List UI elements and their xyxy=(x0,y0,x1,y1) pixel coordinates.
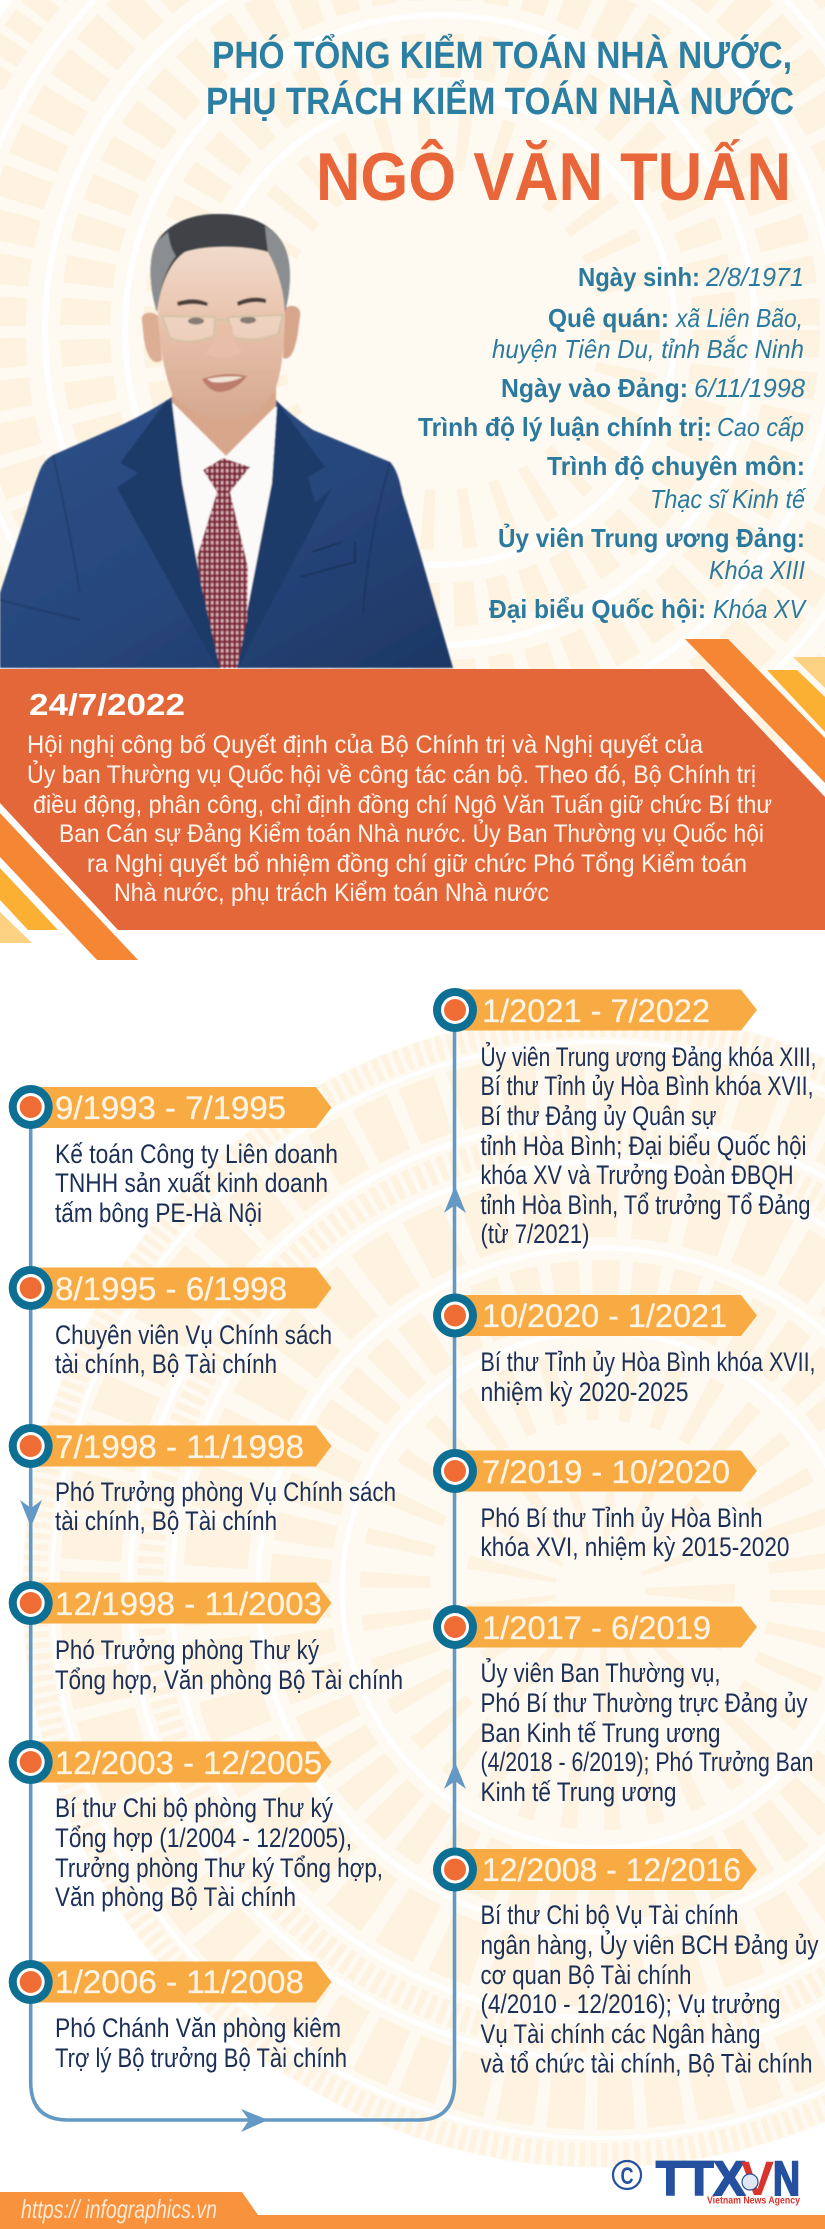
arrow: up upper xyxy=(444,1186,466,1213)
timeline item: 12/2008 - 12/2016 xyxy=(433,1848,819,2078)
timeline item: 12/2008 - 12/2016: Vụ Tài chính các Ngân hàng xyxy=(480,2019,760,2049)
banner text: Hội nghị công bố Quyết định của Bộ Chính trị và Nghị quyết của xyxy=(27,731,703,759)
banner text: điều động, phân công, chỉ định đồng chí Ngô Văn Tuấn giữ chức Bí thư xyxy=(33,791,772,819)
arrow: right xyxy=(241,2109,268,2132)
timeline item: 1/2006 - 11/2008 xyxy=(9,1960,347,2073)
timeline item: 12/1998 - 11/2003: 12/1998 - 11/2003 xyxy=(55,1586,322,1622)
logo: TTXVN Vietnam News Agency xyxy=(613,2153,800,2206)
timeline item: 7/2019 - 10/2020: Phó Bí thư Tỉnh ủy Hòa Bình xyxy=(480,1503,762,1533)
banner text: ra Nghị quyết bổ nhiệm đồng chí giữ chức Phó Tổng Kiểm toán xyxy=(87,850,747,878)
timeline item: 12/2003 - 12/2005 xyxy=(9,1740,383,1912)
personal information list: Cao cấp xyxy=(717,412,804,442)
timeline item: 9/1993 - 7/1995: 9/1993 - 7/1995 xyxy=(55,1090,286,1126)
personal information list: Trình độ lý luận chính trị: xyxy=(418,412,712,442)
personal information list: Thạc sĩ Kinh tế xyxy=(650,484,806,514)
timeline item: 1/2017 - 6/2019: 1/2017 - 6/2019 xyxy=(482,1610,711,1646)
banner text xyxy=(27,731,772,907)
background: lower bronze drum pattern xyxy=(22,1012,825,2168)
personal information list: Ngày vào Đảng: xyxy=(501,373,688,403)
timeline item: 8/1995 - 6/1998 xyxy=(9,1266,332,1379)
logo: TTXVN Vietnam News Agency: TTX xyxy=(656,2153,745,2206)
timeline item: 12/2003 - 12/2005: Trưởng phòng Thư ký Tổng hợp, xyxy=(55,1853,383,1883)
timeline item: 8/1995 - 6/1998: 8/1995 - 6/1998 xyxy=(55,1271,287,1307)
personal information list: xã Liên Bão, xyxy=(674,303,803,333)
timeline item: 12/1998 - 11/2003: Phó Trưởng phòng Thư ký xyxy=(55,1635,320,1665)
timeline item: 1/2017 - 6/2019: Ủy viên Ban Thường vụ, xyxy=(480,1658,720,1688)
timeline item: 1/2017 - 6/2019: Kinh tế Trung ương xyxy=(480,1777,676,1807)
logo: TTXVN Vietnam News Agency: Vietnam News Agency xyxy=(707,2194,800,2206)
personal information list xyxy=(418,262,807,624)
banner date: 24/7/2022 xyxy=(29,687,185,722)
footer bar xyxy=(0,2192,825,2229)
personal information list: 6/11/1998 xyxy=(694,373,806,403)
timeline item: 12/2003 - 12/2005: Bí thư Chi bộ phòng Thư ký xyxy=(55,1793,334,1823)
timeline item: 1/2021 - 7/2022: (từ 7/2021) xyxy=(480,1219,590,1249)
timeline item: 12/1998 - 11/2003 xyxy=(9,1581,403,1695)
timeline item: 12/2003 - 12/2005: 12/2003 - 12/2005 xyxy=(55,1745,322,1781)
timeline item: 10/2020 - 1/2021: nhiệm kỳ 2020-2025 xyxy=(480,1377,688,1407)
timeline item: 12/2008 - 12/2016: (4/2010 - 12/2016); Vụ trưởng xyxy=(480,1989,780,2019)
timeline item: 1/2017 - 6/2019: Ban Kinh tế Trung ương xyxy=(480,1718,720,1748)
timeline item: 8/1995 - 6/1998: tài chính, Bộ Tài chính xyxy=(55,1349,277,1379)
timeline item: 12/2003 - 12/2005: Tổng hợp (1/2004 - 12/2005), xyxy=(55,1823,352,1853)
timeline item: 10/2020 - 1/2021 xyxy=(433,1294,816,1407)
timeline connector line xyxy=(31,1010,454,2120)
banner text: Nhà nước, phụ trách Kiểm toán Nhà nước xyxy=(114,879,549,907)
timeline item: 7/1998 - 11/1998: tài chính, Bộ Tài chính xyxy=(55,1506,277,1536)
timeline item: 9/1993 - 7/1995: tấm bông PE-Hà Nội xyxy=(55,1198,262,1228)
logo: TTXVN Vietnam News Agency: V xyxy=(741,2153,774,2206)
timeline item: 9/1993 - 7/1995: TNHH sản xuất kinh doanh xyxy=(55,1168,328,1198)
timeline item: 1/2017 - 6/2019 xyxy=(433,1605,814,1807)
timeline item: 12/2008 - 12/2016: Bí thư Chi bộ Vụ Tài chính xyxy=(480,1900,738,1930)
personal information list: Khóa XIII xyxy=(709,555,805,585)
timeline item: 12/2008 - 12/2016: cơ quan Bộ Tài chính xyxy=(480,1960,692,1990)
timeline item: 12/1998 - 11/2003: Tổng hợp, Văn phòng Bộ Tài chính xyxy=(55,1665,403,1695)
decorative stripes: top right of banner xyxy=(685,639,825,783)
title xyxy=(206,32,794,123)
banner: 24/7/2022 event xyxy=(0,669,825,930)
timeline item: 12/2003 - 12/2005: Văn phòng Bộ Tài chính xyxy=(55,1882,296,1912)
personal information list: huyện Tiên Du, tỉnh Bắc Ninh xyxy=(492,334,804,364)
personal information list: Đại biểu Quốc hội: xyxy=(489,594,706,624)
timeline item: 8/1995 - 6/1998: Chuyên viên Vụ Chính sách xyxy=(55,1320,332,1350)
personal information list: 2/8/1971 xyxy=(705,262,804,292)
personal information list: Khóa XV xyxy=(713,594,807,624)
timeline item: 1/2021 - 7/2022: Bí thư Đảng ủy Quân sự xyxy=(480,1101,716,1131)
banner text: Ủy ban Thường vụ Quốc hội về công tác cán bộ. Theo đó, Bộ Chính trị xyxy=(27,759,756,789)
logo: TTXVN Vietnam News Agency: N xyxy=(773,2153,800,2206)
personal information list: Quê quán: xyxy=(548,303,669,333)
personal information list: Ngày sinh: xyxy=(578,262,700,292)
timeline item: 7/2019 - 10/2020 xyxy=(433,1449,790,1562)
timeline item: 9/1993 - 7/1995 xyxy=(9,1085,338,1228)
banner text: Ban Cán sự Đảng Kiểm toán Nhà nước. Ủy Ban Thường vụ Quốc hội xyxy=(59,818,764,848)
timeline item: 1/2006 - 11/2008: 1/2006 - 11/2008 xyxy=(55,1964,304,2000)
timeline item: 9/1993 - 7/1995: Kế toán Công ty Liên doanh xyxy=(55,1139,338,1169)
decorative stripes: bottom left of banner xyxy=(0,813,138,960)
timeline item: 7/1998 - 11/1998: Phó Trưởng phòng Vụ Chính sách xyxy=(55,1477,396,1507)
timeline item: 10/2020 - 1/2021: 10/2020 - 1/2021 xyxy=(482,1298,727,1334)
timeline item: 7/2019 - 10/2020: 7/2019 - 10/2020 xyxy=(482,1454,730,1490)
arrow: down xyxy=(20,1500,42,1527)
timeline item: 7/1998 - 11/1998 xyxy=(9,1424,396,1536)
timeline item: 12/2008 - 12/2016: 12/2008 - 12/2016 xyxy=(482,1852,741,1888)
footer url: https:// infographics.vn xyxy=(21,2194,217,2224)
background: upper bronze drum pattern xyxy=(0,0,825,870)
timeline item: 7/1998 - 11/1998: 7/1998 - 11/1998 xyxy=(55,1429,304,1465)
portrait photo xyxy=(0,214,453,668)
personal information list: Trình độ chuyên môn: xyxy=(547,451,805,481)
personal information list: Ủy viên Trung ương Đảng: xyxy=(498,522,805,553)
logo: TTXVN Vietnam News Agency: C xyxy=(620,2163,634,2190)
timeline item: 1/2021 - 7/2022 xyxy=(433,988,816,1249)
arrow: up lower xyxy=(444,1762,466,1789)
timeline item: 1/2006 - 11/2008: Trợ lý Bộ trưởng Bộ Tài chính xyxy=(55,2043,347,2073)
timeline item: 1/2006 - 11/2008: Phó Chánh Văn phòng kiêm xyxy=(55,2013,341,2043)
timeline item: 1/2021 - 7/2022: 1/2021 - 7/2022 xyxy=(482,993,710,1029)
